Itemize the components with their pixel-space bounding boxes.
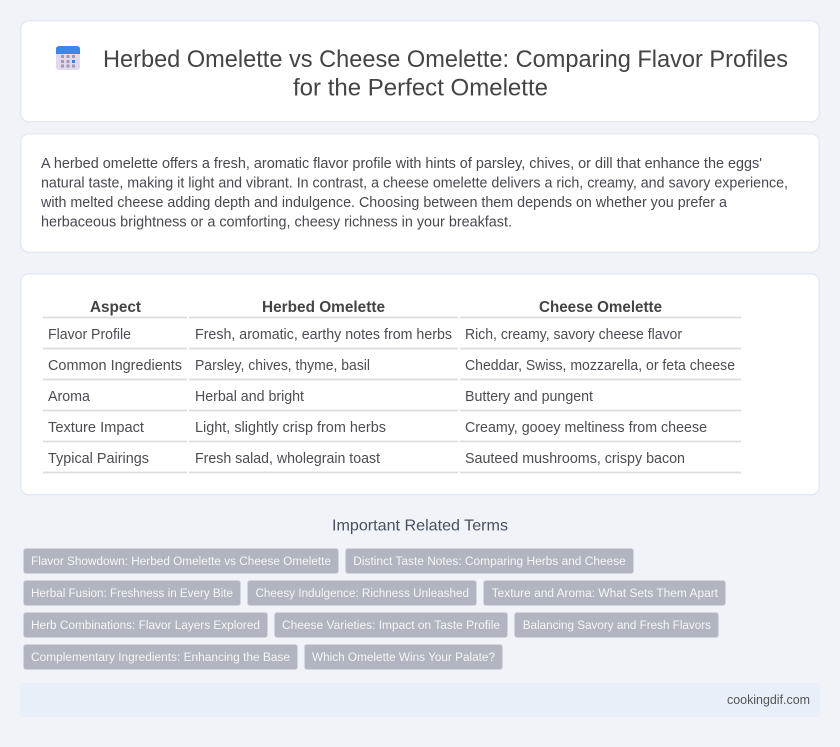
table row: flavor profile: Flavor Profile: [48, 327, 131, 343]
table header: [90, 299, 662, 316]
tag: [274, 612, 508, 638]
table row: flavor profile: Fresh, aromatic, earthy notes from herbs: [195, 327, 452, 343]
heading: related terms: Important Related Terms: [332, 518, 508, 534]
tag: [24, 548, 338, 574]
table row: common ingredients: Cheddar, Swiss, mozzarella, or feta cheese: [465, 358, 735, 374]
footer: cookingdif.com: [727, 693, 810, 707]
panel: introduction: [21, 134, 819, 252]
table row: common ingredients: Common Ingredients: [48, 358, 182, 374]
table row: aroma: Herbal and bright: [195, 389, 304, 405]
panel: title header: [21, 21, 819, 122]
tag: [24, 612, 268, 638]
tag: Complementary Ingredients: Enhancing the Base: [31, 650, 290, 664]
text block: introduction: [40, 156, 788, 230]
text block: introduction: with melted cheese adding depth and indulgence. Choosing between them depends on whether you prefer a: [40, 195, 728, 211]
tag: Cheesy Indulgence: Richness Unleashed: [256, 586, 469, 600]
table row: aroma: Aroma: [48, 389, 91, 405]
title: [103, 46, 788, 102]
tag: [248, 580, 476, 606]
table row: typical pairings: Sauteed mushrooms, crispy bacon: [465, 451, 685, 467]
tag: Flavor Showdown: Herbed Omelette vs Cheese Omelette: [31, 554, 331, 568]
tag: [484, 580, 726, 606]
table row: typical pairings: [48, 451, 685, 467]
table row: texture impact: Light, slightly crisp from herbs: [195, 420, 386, 436]
text block: introduction: herbaceous brightness or a comforting, cheesy richness in your breakfast.: [41, 214, 512, 230]
table row: aroma: [48, 389, 593, 405]
table row: common ingredients: Parsley, chives, thyme, basil: [195, 358, 370, 374]
text block: introduction: natural taste, making it light and vibrant. In contrast, a cheese omelette delivers a rich, creamy, and savory experience,: [41, 176, 788, 192]
tag: [304, 644, 502, 670]
tag: Balancing Savory and Fresh Flavors: [523, 618, 711, 632]
icon: calendar: [56, 46, 80, 70]
table row: flavor profile: Rich, creamy, savory cheese flavor: [465, 327, 682, 343]
title: for the Perfect Omelette: [293, 74, 548, 102]
table header: Herbed Omelette: [262, 299, 385, 316]
table row: texture impact: Creamy, gooey meltiness from cheese: [465, 420, 707, 436]
tag: Herbal Fusion: Freshness in Every Bite: [31, 586, 233, 600]
table header: Cheese Omelette: [539, 299, 662, 316]
text block: introduction: A herbed omelette offers a fresh, aromatic flavor profile with hints of parsley, chives, or dill that enhance the eggs': [41, 156, 762, 172]
table row: texture impact: [48, 420, 707, 436]
table row: texture impact: Texture Impact: [48, 420, 144, 436]
table row: aroma: Buttery and pungent: [465, 389, 593, 405]
tag: Cheese Varieties: Impact on Taste Profile: [282, 618, 500, 632]
tag: Which Omelette Wins Your Palate?: [312, 650, 495, 664]
tag: [24, 644, 298, 670]
footer: [20, 683, 820, 717]
title: Herbed Omelette vs Cheese Omelette: Comparing Flavor Profiles: [103, 46, 788, 73]
tag: Texture and Aroma: What Sets Them Apart: [492, 586, 719, 600]
table row: flavor profile: [48, 327, 682, 343]
tag: [514, 612, 718, 638]
tag: Distinct Taste Notes: Comparing Herbs and Cheese: [353, 554, 626, 568]
table row: typical pairings: Typical Pairings: [48, 451, 149, 467]
table row: typical pairings: Fresh salad, wholegrain toast: [195, 451, 380, 467]
table row: common ingredients: [48, 358, 735, 374]
tag: [346, 548, 634, 574]
table header: Aspect: [90, 299, 142, 316]
tag: [24, 580, 240, 606]
panel: comparison table: [21, 274, 819, 495]
panel: related term tags: [24, 548, 726, 670]
tag: Herb Combinations: Flavor Layers Explored: [31, 618, 260, 632]
